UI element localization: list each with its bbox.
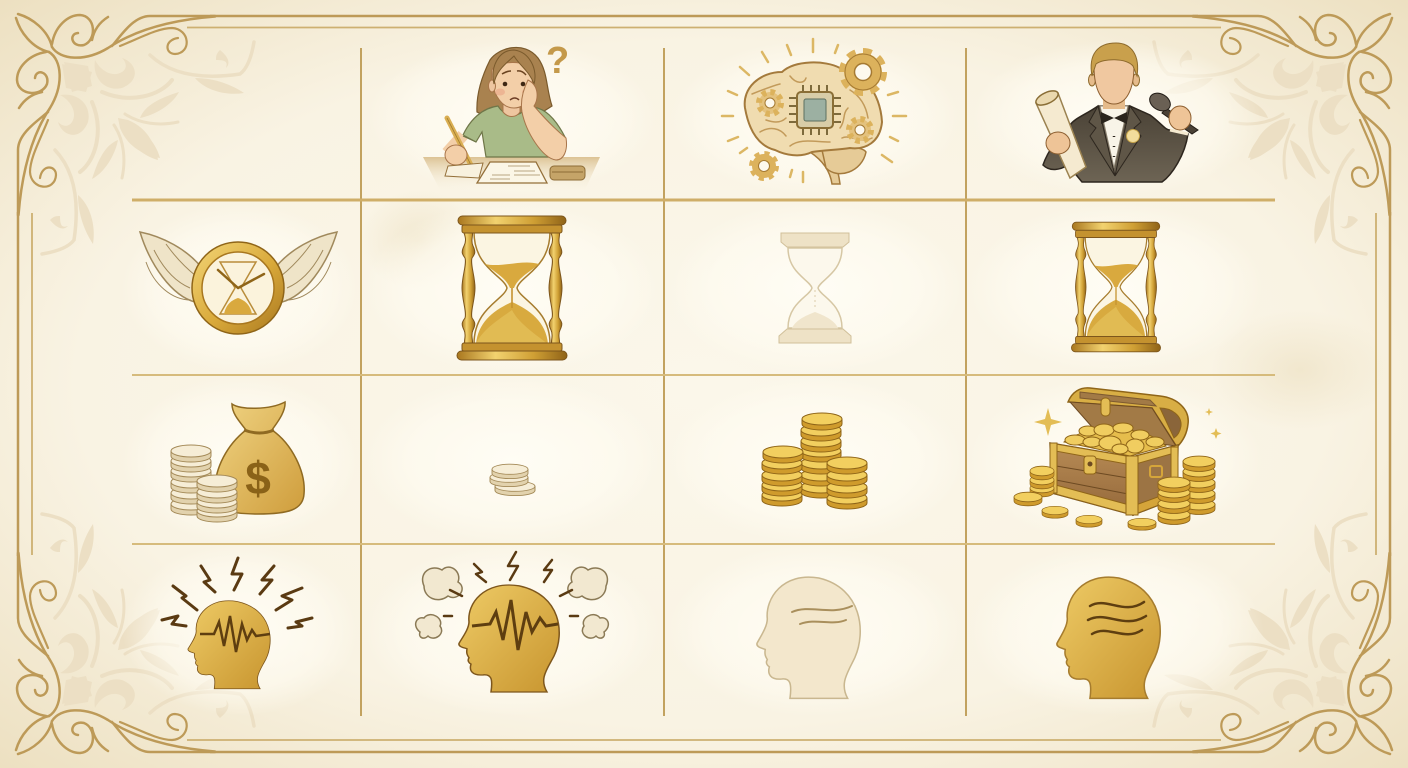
- icon: money bag with pale coins: [171, 402, 304, 522]
- icon: treasure chest: [1014, 388, 1222, 530]
- icon: pale hourglass: [779, 233, 851, 343]
- icon: gold coin stacks: [762, 413, 867, 509]
- icon: stressed head with bolts: [162, 558, 312, 689]
- icon: medium gold hourglass: [1071, 222, 1161, 352]
- icon: worried student at desk: ?: [546, 40, 569, 82]
- icon: wedding host with scroll and microphone: [1034, 43, 1198, 182]
- icon: winged clock: [140, 232, 337, 334]
- icon: money bag with pale coins: $: [245, 452, 271, 504]
- icon: brain with chip and gears: [722, 39, 906, 184]
- icon: calm pale head: [757, 577, 860, 698]
- icon: overloaded head with steam: [416, 552, 608, 692]
- icon: worried student at desk: [423, 40, 600, 190]
- icon: few pale coins: [490, 464, 535, 496]
- icon: large gold hourglass: [457, 216, 567, 360]
- icon: calm gold head: [1057, 577, 1160, 698]
- cell glows: [122, 40, 1264, 716]
- table grid lines: [132, 48, 1275, 716]
